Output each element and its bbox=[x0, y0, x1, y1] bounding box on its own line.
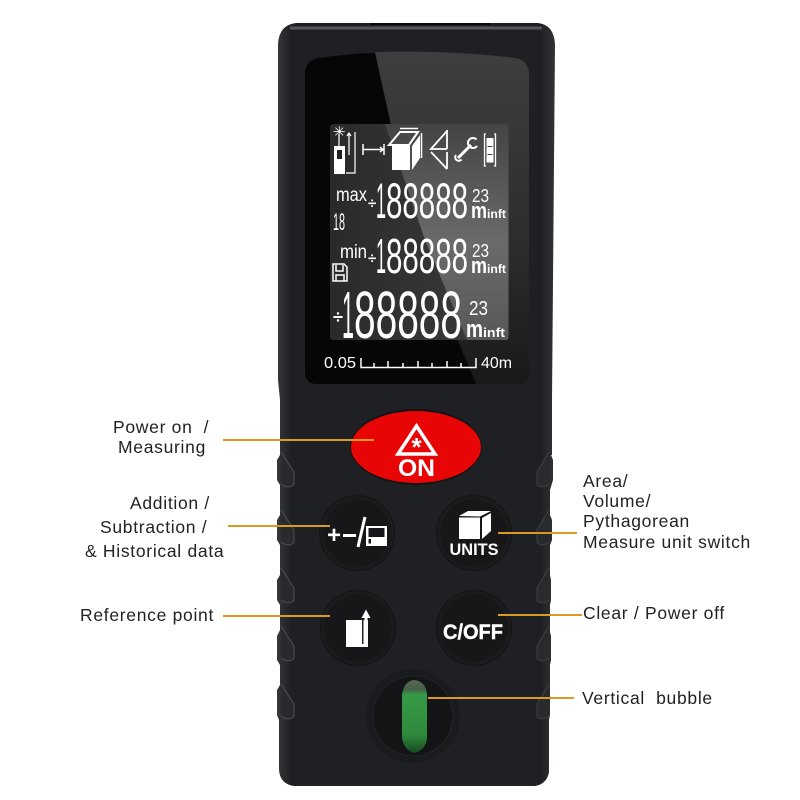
range scale: 40m bbox=[481, 355, 512, 372]
button: add subtract: + bbox=[327, 522, 341, 549]
button: add subtract bbox=[319, 495, 395, 571]
button: clear off: C/OFF bbox=[443, 620, 503, 644]
button: ON: ON bbox=[398, 455, 435, 482]
row min: inft bbox=[487, 262, 506, 276]
vertical bubble level bbox=[366, 669, 460, 763]
row main: 23 bbox=[469, 298, 488, 320]
button: reference point bbox=[320, 590, 396, 666]
label: vertical bubble: Vertical bubble bbox=[582, 688, 713, 708]
row min: 88888 bbox=[386, 230, 468, 284]
label: units: Area/ bbox=[583, 471, 628, 491]
status icons: ✳ bbox=[333, 124, 346, 141]
label: addition subtraction bbox=[85, 493, 224, 561]
LCD panel bbox=[330, 124, 508, 340]
row min: 1 bbox=[376, 230, 386, 284]
device body bbox=[277, 23, 555, 786]
label: units: Volume/ bbox=[583, 491, 651, 511]
row max: ÷ bbox=[368, 195, 376, 212]
range scale bbox=[324, 355, 512, 372]
label: units: Measure unit switch bbox=[583, 532, 751, 552]
label: addition subtraction: Subtraction / bbox=[100, 517, 207, 537]
row max: 88888 bbox=[386, 173, 468, 229]
row main: ÷ bbox=[333, 307, 343, 327]
display screen bbox=[305, 52, 529, 384]
button: ON bbox=[350, 409, 482, 485]
row max: 23 bbox=[472, 186, 489, 206]
row min: 23 bbox=[472, 241, 489, 261]
label: addition subtraction: & Historical data bbox=[85, 541, 224, 561]
row main: m bbox=[466, 316, 483, 343]
row main: inft bbox=[483, 325, 506, 340]
row max: inft bbox=[487, 207, 506, 221]
LCD readouts bbox=[333, 173, 506, 353]
label: power on: Measuring bbox=[118, 437, 206, 457]
button: clear off bbox=[436, 590, 512, 666]
row min: ÷ bbox=[368, 250, 376, 267]
row min bbox=[333, 230, 506, 284]
label: units bbox=[583, 471, 751, 552]
label: clear power off: Clear / Power off bbox=[583, 603, 725, 623]
row main: 88888 bbox=[354, 278, 462, 353]
button: ON: * bbox=[411, 432, 422, 462]
row max: max bbox=[336, 185, 367, 206]
row max: 1 bbox=[376, 173, 386, 229]
leader lines bbox=[223, 440, 582, 698]
row max: m bbox=[471, 198, 487, 223]
label: reference point: Reference point bbox=[80, 605, 214, 625]
status icons bbox=[333, 124, 496, 174]
label: addition subtraction: Addition / bbox=[130, 493, 210, 513]
row max bbox=[333, 173, 506, 236]
row max: 18 bbox=[333, 209, 345, 236]
range scale: 0.05 bbox=[324, 355, 356, 372]
label: units: Pythagorean bbox=[583, 511, 690, 531]
row main: 1 bbox=[342, 278, 354, 353]
label: power on bbox=[113, 417, 209, 457]
button: units bbox=[436, 495, 512, 571]
row min: m bbox=[471, 253, 487, 278]
label: power on: Power on / bbox=[113, 417, 209, 437]
row min: min bbox=[340, 242, 367, 263]
button: units: UNITS bbox=[450, 541, 498, 559]
